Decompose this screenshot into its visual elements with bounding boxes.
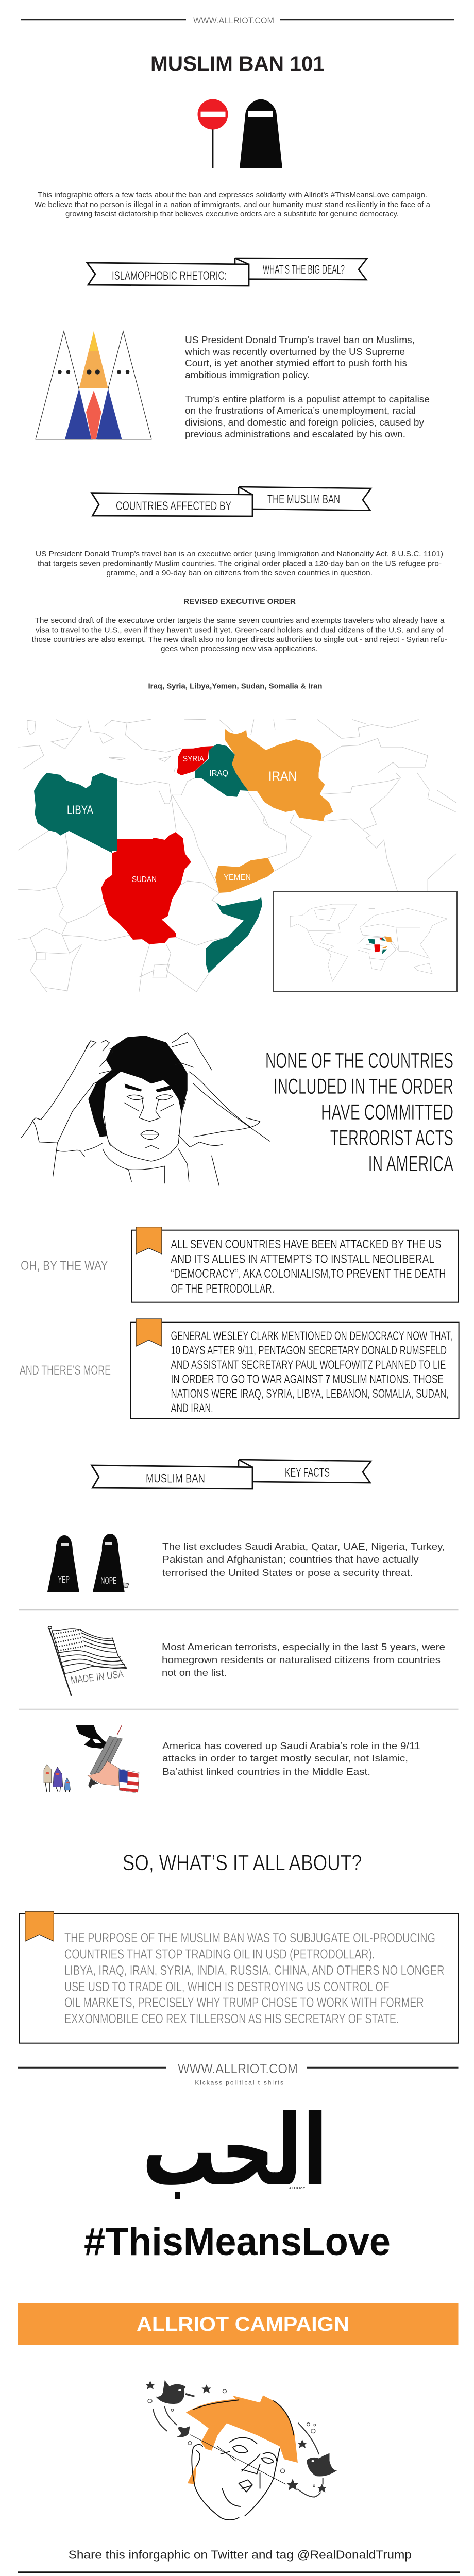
share prompt: Share this inforgaphic on Twitter and tag @RealDonaldTrump: [69, 2548, 412, 2562]
text: revised order: gees when processing new visa applications.: [161, 645, 318, 653]
ribbon heading: Islamophobic rhetoric: WHAT’S THE BIG DEAL?: [263, 263, 345, 277]
country: Syria: SYRIA: [183, 755, 204, 764]
ribbon heading: key facts: KEY FACTS: [285, 1466, 330, 1480]
text: revised order: The second draft of the executuve order targets the same seven countries and exempts travelers who already have a: [35, 616, 445, 625]
ribbon heading: Islamophobic rhetoric: ISLAMOPHOBIC RHETORIC:: [112, 269, 227, 283]
hashtag: #ThisMeansLove: [84, 2220, 391, 2264]
icon: American flag: [48, 1626, 126, 1695]
intro text: This infographic offers a few facts about the ban and expresses solidarity with Allriot’s #ThisMeansLove campaign.: [38, 191, 427, 199]
country: Yemen: YEMEN: [224, 873, 251, 882]
text: list excludes: Pakistan and Afghanistan; countries that have actually: [162, 1554, 419, 1565]
country: Syria: [177, 746, 214, 775]
icon: burqas labelled yep and nope: NOPE: [100, 1575, 116, 1586]
website header: WWW.ALLRIOT.COM: [193, 15, 274, 25]
country: Iraq: IRAQ: [210, 769, 228, 778]
heading: revised executive order: REVISED EXECUTIVE ORDER: [183, 597, 296, 606]
text: American terrorists: homegrown residents or naturalised citizens from countries: [162, 1655, 441, 1665]
text: what's the big deal: previous administrations and escalated by his own.: [185, 429, 405, 439]
callout box: General Wesley Clark: AND IRAN.: [171, 1401, 213, 1415]
illustration: facepalm meme: [21, 1033, 269, 1186]
text: what's the big deal: [184, 335, 430, 439]
callout box: purpose of the ban: [20, 1911, 458, 2043]
ribbon heading: key facts: [92, 1460, 371, 1489]
text: revised order: visa to travel to the U.S., even if they haven't used it yet. Green-card holders and dual citizens of the U.S. and any of: [36, 626, 444, 635]
text: America has covered up: Ba’athist linked countries in the Middle East.: [162, 1767, 370, 1777]
icon: burqas labelled yep and nope: YEP: [58, 1574, 70, 1585]
text: what's the big deal: which was recently overturned by the US Supreme: [184, 347, 405, 357]
ribbon heading: countries affected: COUNTRIES AFFECTED BY: [116, 499, 231, 513]
ribbon heading: countries affected: [92, 487, 371, 516]
text: revised order: those countries are also exempt. The new draft also no longer directs authorities to single out - and reject - Syrian refu-: [32, 635, 447, 644]
country: Somalia: [206, 897, 262, 973]
text: American terrorists: Most American terrorists, especially in the last 5 years, were: [162, 1642, 445, 1652]
world map inset: [274, 892, 457, 992]
banner: Allriot campaign: ALLRIOT CAMPAIGN: [137, 2314, 349, 2335]
map outlines: [18, 719, 456, 992]
Arabic word for love: الحب: [142, 2093, 328, 2208]
country: Sudan: SUDAN: [132, 875, 157, 884]
callout: none of the countries: [265, 1048, 453, 1176]
text: what's the big deal: divisions, and domestic and foreign policies, caused by: [185, 417, 424, 428]
text: American terrorists: not on the list.: [162, 1668, 227, 1678]
ribbon heading: key facts: MUSLIM BAN: [146, 1472, 205, 1486]
text: America has covered up: America has covered up Saudi Arabia’s role in the 9/11: [162, 1741, 420, 1751]
intro text: growing fascist dictatorship that believes executive orders are a substitute for genuine democracy.: [65, 210, 399, 218]
icon: hooded figures: [36, 331, 151, 439]
callout box: purpose of the ban: COUNTRIES THAT STOP TRADING OIL IN USD (PETRODOLLAR).: [64, 1946, 375, 1962]
icon: American flag: MADE IN USA: [70, 1669, 124, 1686]
icon: burqas labelled yep and nope: [47, 1534, 129, 1592]
text: America has covered up: [162, 1741, 420, 1777]
country: Iraq: [195, 744, 248, 797]
icon: no-entry sign and burqa: [198, 99, 282, 168]
text: executive order: gramme, and a 90-day ban on citizens from the seven countries in question.: [106, 569, 373, 578]
ribbon heading: countries affected: THE MUSLIM BAN: [267, 493, 340, 506]
text: executive order: US President Donald Trump’s travel ban is an executive order (using Immigration and Nationality Act, 8 U.S.C. 1101): [36, 550, 443, 558]
label: and there's more: AND THERE’S MORE: [20, 1363, 111, 1378]
heading: so what's it all about: SO, WHAT’S IT ALL ABOUT?: [123, 1851, 362, 1875]
text: list excludes: The list excludes Saudi Arabia, Qatar, UAE, Nigeria, Turkey,: [162, 1541, 445, 1552]
website footer banner: Kickass political t-shirts: [195, 2079, 283, 2087]
country: Libya: [34, 773, 117, 853]
text: what's the big deal: ambitious immigration policy.: [185, 370, 310, 380]
website footer banner: WWW.ALLRIOT.COM: [178, 2061, 298, 2076]
website footer banner: [18, 2061, 459, 2087]
text: what's the big deal: US President Donald Trump’s travel ban on Muslims,: [185, 335, 415, 345]
country: Sudan: [101, 832, 191, 944]
text: what's the big deal: Trump’s entire platform is a populist attempt to capitalise: [185, 394, 430, 404]
country: Iran: [225, 729, 333, 821]
text: list excludes: terrorised the United States or pose a security threat.: [162, 1568, 413, 1578]
Arabic word for love: ALLRIOT: [289, 2187, 306, 2190]
callout box: all seven countries: OF THE PETRODOLLAR.: [171, 1282, 274, 1296]
ribbon heading: Islamophobic rhetoric: [87, 258, 367, 286]
text: executive order: that targets seven predominantly Muslim countries. The original order placed a 120-day ban on the US refugee pro-: [38, 560, 442, 568]
text: what's the big deal: Court, is yet another stymied effort to push forth his: [185, 358, 407, 368]
country: Libya: LIBYA: [67, 803, 93, 817]
illustration: tower pencil cartoon: [44, 1725, 139, 1793]
label: oh, by the way: OH, BY THE WAY: [21, 1259, 108, 1273]
title: MUSLIM BAN 101: [150, 53, 325, 75]
callout box: all seven countries: [131, 1227, 459, 1302]
country: Iran: IRAN: [268, 769, 297, 784]
text: America has covered up: attacks in order to target mostly secular, not Islamic,: [162, 1753, 408, 1764]
map of affected countries: [18, 719, 457, 992]
illustration: Trump head with twitter birds: [145, 2380, 337, 2520]
intro text: We believe that no person is illegal in a nation of immigrants, and our humanity must stand resiliently in the face of a: [35, 200, 431, 209]
text: list excludes: [162, 1541, 445, 1578]
banner: Allriot campaign: [18, 2303, 459, 2345]
text: American terrorists: [162, 1642, 445, 1678]
country list: Iraq, Syria, Libya,Yemen, Sudan, Somalia & Iran: [148, 682, 323, 691]
intro text: [35, 191, 431, 218]
text: executive order: [36, 550, 443, 578]
text: what's the big deal: on the frustrations of America’s unemployment, racial: [185, 405, 416, 416]
country: Yemen: [215, 858, 275, 893]
callout box: General Wesley Clark: [131, 1319, 459, 1419]
text: revised order: [32, 616, 447, 653]
